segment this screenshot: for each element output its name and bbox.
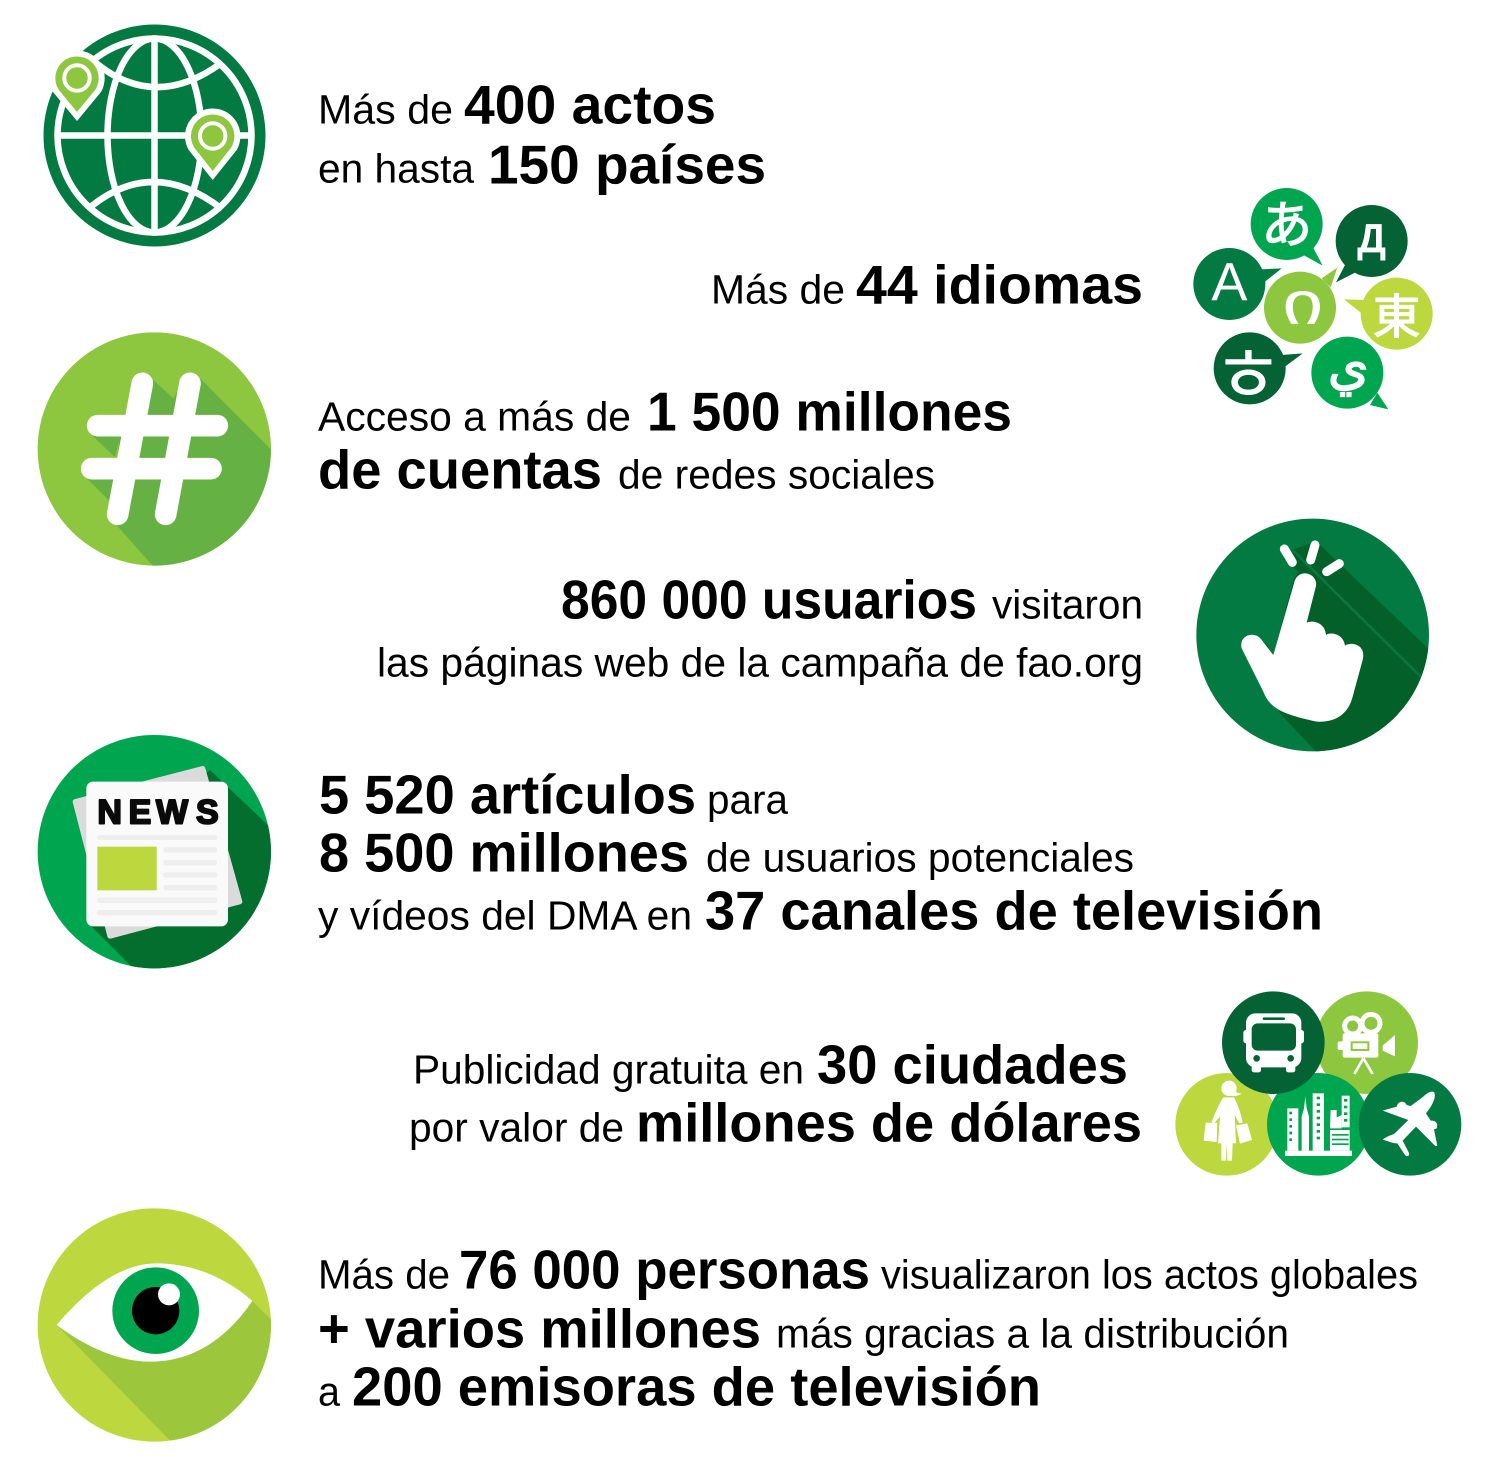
text: 76 000 personas: 200 emisoras de televisión bbox=[352, 1356, 1041, 1418]
bubble: cyrillic bbox=[1336, 205, 1408, 282]
text: publicidad gratuita bbox=[409, 1034, 1142, 1154]
bubble: latin bbox=[1193, 248, 1282, 320]
text: 860 000 usuarios bbox=[377, 568, 1143, 686]
text: 76 000 personas: Más de bbox=[318, 1252, 450, 1298]
bubble: kanji: 東 bbox=[1373, 291, 1420, 344]
text: más de 44 idiomas bbox=[711, 254, 1143, 316]
icon: newspaper bbox=[38, 735, 280, 980]
text: acceso a 1 500 millones de cuentas bbox=[318, 380, 1012, 500]
text: 5 520 artículos: de usuarios potenciales bbox=[706, 834, 1134, 880]
text: 76 000 personas: + varios millones bbox=[318, 1298, 761, 1360]
bubble: kanji bbox=[1344, 278, 1433, 350]
text: acceso a 1 500 millones de cuentas: Acceso a más de bbox=[318, 394, 631, 440]
bubble: center script bbox=[1264, 268, 1337, 344]
text: 400 actos en hasta 150 países bbox=[318, 74, 766, 196]
text: 76 000 personas: a bbox=[318, 1368, 340, 1414]
text: 5 520 artículos: 5 520 artículos bbox=[319, 764, 696, 826]
text: 5 520 artículos bbox=[318, 764, 1323, 942]
video camera bbox=[1315, 991, 1418, 1094]
icon: language speech bubbles bbox=[1193, 188, 1433, 419]
text: publicidad gratuita: Publicidad gratuita en bbox=[413, 1046, 804, 1092]
text: 5 520 artículos: para bbox=[707, 776, 788, 822]
text: publicidad gratuita: 30 ciudades bbox=[817, 1034, 1128, 1096]
text: más de 44 idiomas: Más de bbox=[711, 266, 845, 312]
text: 5 520 artículos: 8 500 millones bbox=[319, 822, 689, 884]
text: 76 000 personas bbox=[318, 1238, 1418, 1418]
text: acceso a 1 500 millones de cuentas: 1 500 millones bbox=[647, 380, 1012, 442]
headline: NEWS bbox=[97, 793, 219, 831]
airplane bbox=[1359, 1073, 1461, 1176]
skyline bbox=[1267, 1073, 1370, 1176]
text: acceso a 1 500 millones de cuentas: de redes sociales bbox=[618, 452, 935, 498]
bubble: arabic bbox=[1311, 335, 1388, 409]
text: 860 000 usuarios: 860 000 usuarios bbox=[561, 568, 977, 630]
text: más de 44 idiomas: 44 idiomas bbox=[856, 254, 1143, 316]
icon: hashtag bbox=[38, 332, 278, 578]
text: publicidad gratuita: millones de dólares bbox=[636, 1092, 1142, 1154]
bubble: hangul: ㅎ bbox=[1213, 334, 1283, 419]
bubble: center script: ი bbox=[1282, 269, 1324, 339]
bus bbox=[1222, 991, 1325, 1094]
text: 400 actos en hasta 150 países: 150 países bbox=[488, 134, 766, 196]
text: 5 520 artículos: y vídeos del DMA en bbox=[318, 892, 692, 938]
text: 5 520 artículos: 37 canales de televisión bbox=[705, 880, 1323, 942]
icon: city advertising cluster bbox=[1175, 991, 1461, 1176]
bubble: cyrillic: Д bbox=[1357, 216, 1386, 262]
text: 400 actos en hasta 150 países: 400 actos bbox=[464, 74, 716, 136]
text: 400 actos en hasta 150 países: en hasta bbox=[318, 146, 474, 192]
text: 860 000 usuarios: visitaron bbox=[992, 582, 1143, 628]
bubble: latin: A bbox=[1211, 253, 1247, 313]
icon: globe with map pins bbox=[44, 24, 266, 246]
icon: pointing hand bbox=[1196, 519, 1437, 767]
bubble: hiragana bbox=[1251, 188, 1323, 266]
text: 400 actos en hasta 150 países: Más de bbox=[318, 86, 453, 132]
shopper bbox=[1175, 1073, 1278, 1176]
text: 860 000 usuarios: las páginas web de la campaña de fao.org bbox=[377, 640, 1143, 686]
text: 76 000 personas: más gracias a la distribución bbox=[776, 1310, 1289, 1356]
text: acceso a 1 500 millones de cuentas: de cuentas bbox=[318, 438, 602, 500]
text: 76 000 personas: visualizaron los actos globales bbox=[881, 1252, 1418, 1298]
bubble: hiragana: あ bbox=[1261, 197, 1312, 254]
text: 76 000 personas: 76 000 personas bbox=[459, 1238, 870, 1300]
bubble: arabic: ي bbox=[1328, 335, 1369, 396]
text: publicidad gratuita: por valor de bbox=[409, 1104, 624, 1150]
icon: eye bbox=[38, 1208, 278, 1453]
